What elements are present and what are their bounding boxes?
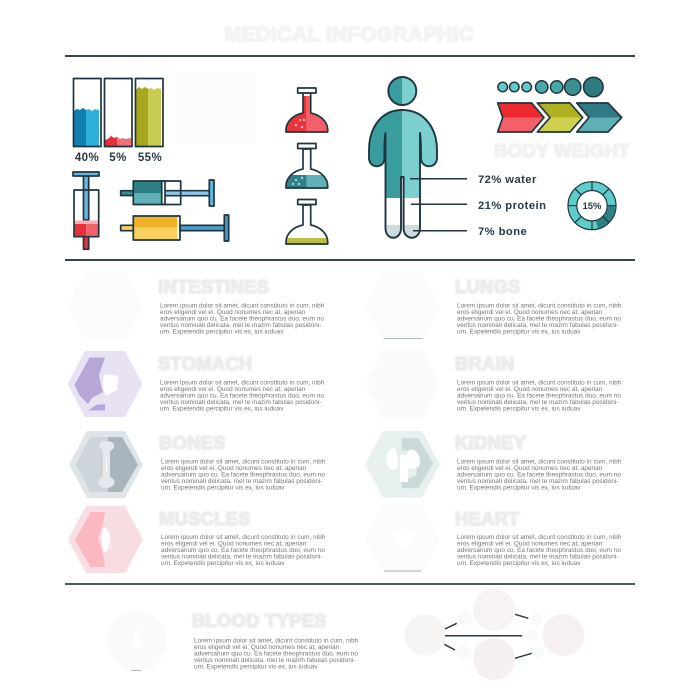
text block: um. Expetendis percipitur vis ex, ius iuduav [457, 560, 581, 567]
heading: BONES [159, 433, 226, 453]
bar: 5% [104, 78, 132, 146]
text block: adversarium quo cu. Ea facete theophrastus duo, eum no [457, 316, 621, 322]
chevron arrows [498, 103, 622, 132]
text block: eros eligendi vel ei. Quod nonumes nec at, aperian [457, 465, 603, 472]
heading: KIDNEY [455, 433, 526, 453]
icon: red flask [286, 88, 328, 132]
text block: Lorem ipsum dolor sit amet, dicunt constituto in cum, nibh [194, 638, 359, 644]
icon: intestines hexagon [68, 273, 142, 340]
icon: bones hexagon [69, 431, 143, 498]
text block: um. Expetendis percipitur vis ex, ius iuduav [194, 664, 318, 670]
type circles [404, 589, 584, 680]
title: MEDICAL INFOGRAPHIC [224, 23, 474, 46]
bar labels: 55% [138, 152, 162, 164]
panel: blood types [107, 611, 360, 671]
bar: 40% [74, 78, 101, 146]
heading: INTESTINES [158, 277, 269, 297]
panel: stomach [68, 351, 326, 417]
text block: adversarium quo cu. Ea facete theophrastus duo, eum no [457, 547, 621, 554]
icon: stomach hexagon [68, 351, 142, 417]
icon: vertical syringe [73, 172, 99, 249]
text block: veritus nominati delicata, mel te mazim fabulas posidoni- [160, 322, 321, 329]
text block: adversarium quo cu. Ea facete theophrastus duo, eum no [194, 650, 358, 658]
text block: adversarium quo cu. Ea facete theophrastus duo, eum no [457, 392, 621, 400]
icon: human body [365, 77, 546, 240]
icon: kidney hexagon [365, 431, 440, 498]
text block: um. Expetendis percipitur vis ex, ius iuduav [160, 406, 284, 412]
icon: blood drop circle [107, 611, 167, 671]
text block: veritus nominati delicata, mel te mazim fabulas posidoni- [161, 478, 322, 485]
donut chart [568, 182, 616, 230]
heading: BLOOD TYPES [192, 611, 327, 631]
callout labels: 7% bone [478, 226, 527, 238]
icon: olive flask [286, 200, 328, 244]
text block: um. Expetendis percipitur vis ex, ius iuduav [161, 560, 285, 567]
icon: lungs hexagon [365, 273, 440, 340]
text block: adversarium quo cu. Ea facete theophrastus duo, eum no [161, 472, 325, 478]
text block: eros eligendi vel ei. Quod nonumes nec at, aperian [161, 540, 307, 548]
panel: heart [365, 505, 623, 571]
panel: intestines [68, 273, 326, 340]
text block: eros eligendi vel ei. Quod nonumes nec at, aperian [160, 309, 306, 316]
heading: LUNGS [455, 277, 521, 297]
callout labels [478, 174, 546, 238]
body fill [370, 111, 436, 237]
heading: body weight: BODY WEIGHT [494, 140, 630, 161]
middle divider [65, 259, 635, 261]
text block: um. Expetendis percipitur vis ex, ius iuduav [457, 406, 581, 412]
icon: teal flask [286, 144, 328, 188]
olive chevron [537, 103, 583, 132]
panel: bones [69, 431, 327, 498]
text block: veritus nominati delicata, mel te mazim fabulas posidoni- [161, 554, 322, 560]
heading: STOMACH [158, 354, 252, 374]
callout labels: 72% water [478, 174, 537, 186]
text block: adversarium quo cu. Ea facete theophrastus duo, eum no [161, 547, 325, 554]
donut chart: 15% [582, 201, 602, 212]
bar labels: 5% [109, 152, 127, 164]
diagram: blood type compatibility [404, 589, 584, 680]
icon: heart hexagon [365, 505, 440, 571]
text block: eros eligendi vel ei. Quod nonumes nec at, aperian [161, 465, 307, 472]
bottom divider [65, 583, 635, 585]
faint block beside bars [176, 74, 256, 142]
panel: lungs [365, 273, 623, 340]
head [388, 77, 416, 105]
text block: Lorem ipsum dolor sit amet, dicunt constituto in cum, nibh [161, 458, 326, 466]
text block: adversarium quo cu. Ea facete theophrastus duo, eum no [457, 472, 621, 478]
text block: um. Expetendis percipitur vis ex, ius iuduav [161, 484, 285, 492]
teal chevron [577, 103, 622, 132]
text block: veritus nominati delicata, mel te mazim fabulas posidoni- [457, 554, 618, 560]
text block: veritus nominati delicata, mel te mazim fabulas posidoni- [457, 478, 618, 485]
text block: eros eligendi vel ei. Quod nonumes nec at, aperian [160, 386, 306, 393]
bar labels [75, 152, 162, 164]
panel: kidney [365, 431, 623, 498]
text block: veritus nominati delicata, mel te mazim fabulas posidoni- [194, 657, 355, 664]
text block: um. Expetendis percipitur vis ex, ius iuduav [457, 328, 581, 336]
icon: brain hexagon [365, 350, 440, 418]
text block: um. Expetendis percipitur vis ex, ius iuduav [160, 328, 284, 336]
arrows [444, 614, 532, 658]
panel: brain [365, 350, 623, 418]
small faint nodes [456, 611, 544, 660]
text block: veritus nominati delicata, mel te mazim fabulas posidoni- [160, 399, 321, 406]
callout labels: 21% protein [478, 200, 546, 212]
text block: Lorem ipsum dolor sit amet, dicunt constituto in cum, nibh [160, 380, 325, 386]
text block: eros eligendi vel ei. Quod nonumes nec at, aperian [457, 386, 603, 393]
icon: muscles hexagon [68, 506, 143, 573]
red chevron [498, 103, 544, 132]
text block: adversarium quo cu. Ea facete theophrastus duo, eum no [160, 316, 324, 322]
text block: Lorem ipsum dolor sit amet, dicunt constituto in cum, nibh [457, 380, 622, 386]
panel: blood composition bars [74, 78, 163, 164]
text block: Lorem ipsum dolor sit amet, dicunt constituto in cum, nibh [457, 302, 622, 310]
callout lines [410, 179, 467, 231]
top divider [65, 55, 635, 57]
icon: yellow syringe [121, 215, 229, 241]
heading: BRAIN [455, 354, 515, 374]
text block: adversarium quo cu. Ea facete theophrastus duo, eum no [160, 392, 324, 400]
dots progression [498, 77, 603, 97]
text block: um. Expetendis percipitur vis ex, ius iuduav [457, 484, 581, 492]
panel: muscles [68, 506, 327, 573]
text block: Lorem ipsum dolor sit amet, dicunt constituto in cum, nibh [161, 534, 326, 541]
text block: veritus nominati delicata, mel te mazim fabulas posidoni- [457, 322, 618, 329]
heading: MUSCLES [159, 509, 251, 529]
text block: eros eligendi vel ei. Quod nonumes nec at, aperian [457, 309, 603, 316]
text block: Lorem ipsum dolor sit amet, dicunt constituto in cum, nibh [457, 458, 622, 466]
bar labels: 40% [75, 152, 99, 164]
text block: Lorem ipsum dolor sit amet, dicunt constituto in cum, nibh [160, 302, 325, 310]
text block: Lorem ipsum dolor sit amet, dicunt constituto in cum, nibh [457, 534, 622, 541]
body outline [369, 110, 437, 238]
text block: veritus nominati delicata, mel te mazim fabulas posidoni- [457, 399, 618, 406]
heading: HEART [455, 509, 520, 529]
bar: 55% [136, 78, 163, 146]
text block: eros eligendi vel ei. Quod nonumes nec at, aperian [457, 540, 603, 548]
icon: teal syringe [121, 180, 214, 206]
text block: eros eligendi vel ei. Quod nonumes nec at, aperian [194, 644, 340, 651]
